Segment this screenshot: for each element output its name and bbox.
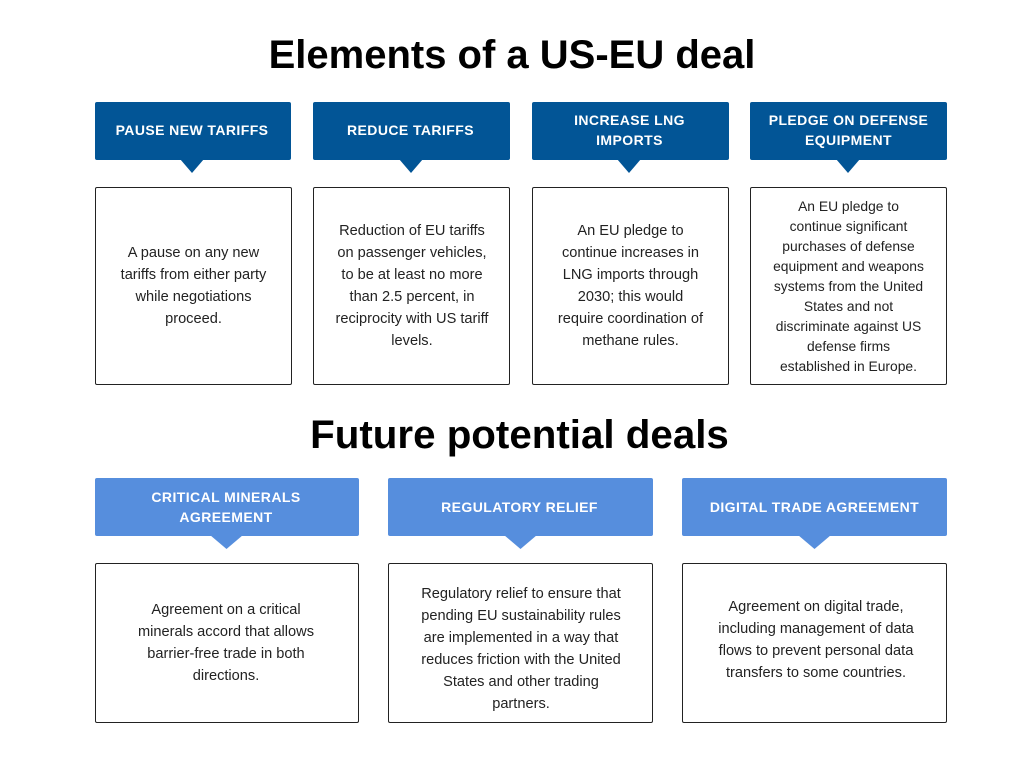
card: pledge on defense equipment text: equipment and weapons [773,258,924,274]
card: critical minerals text: Agreement on a critical [151,602,301,618]
card: reduce tariffs text: Reduction of EU tariffs [339,223,485,239]
tag: pledge on defense equipment: PLEDGE ON DEFENSE [769,112,928,128]
tag: digital trade agreement [682,478,947,549]
card: increase LNG imports text: 2030; this would [578,289,683,305]
card: pledge on defense equipment text: systems from the United [774,278,923,294]
card: pledge on defense equipment text: States and not [804,298,893,314]
tag: increase LNG imports: IMPORTS [596,132,663,148]
card: pledge on defense equipment text: established in Europe. [780,358,917,374]
tag: critical minerals agreement: CRITICAL MINERALS [151,489,301,505]
card: pause new tariffs text: while negotiations [135,289,252,305]
card: reduce tariffs text: reciprocity with US tariff [335,311,488,327]
card: pledge on defense equipment text: An EU pledge to [798,198,899,214]
tag: digital trade agreement: DIGITAL TRADE AGREEMENT [710,499,919,515]
tag: critical minerals agreement [95,478,359,549]
card: pause new tariffs text: proceed. [165,311,222,327]
tag: reduce tariffs [313,102,510,173]
card: reduce tariffs text: than 2.5 percent, in [350,289,474,305]
card: increase LNG imports text: require coordination of [558,311,703,327]
heading: Future potential deals: Future potential deals [310,412,729,457]
card: critical minerals text: minerals accord that allows [138,624,314,640]
card: pause new tariffs text: tariffs from either party [121,267,266,283]
card: regulatory relief text: partners. [492,696,550,712]
card: digital trade text: flows to prevent personal data [719,643,913,659]
card: regulatory relief text: Regulatory relief to ensure that [421,586,621,602]
tag: pledge on defense equipment: EQUIPMENT [805,132,892,148]
title: Elements of a US-EU deal: Elements of a US-EU deal [269,33,755,77]
card: reduce tariffs text: on passenger vehicles, [337,245,487,261]
card: digital trade text: including management of data [718,621,914,637]
card: regulatory relief text: reduces friction with the United [421,652,621,668]
card: pledge on defense equipment text: purchases of defense [782,238,915,254]
card: critical minerals text [95,563,359,723]
tag: pledge on defense equipment [750,102,947,173]
card: regulatory relief text: States and other trading [443,674,599,690]
card: reduce tariffs text: to be at least no more [341,267,483,283]
card: increase LNG imports text: methane rules. [582,333,679,349]
card: reduce tariffs text [313,187,510,385]
tag: increase LNG imports: INCREASE LNG [574,112,685,128]
card: pledge on defense equipment text: discriminate against US [776,318,921,334]
card: pause new tariffs text [95,187,292,385]
card: critical minerals text: directions. [193,668,259,684]
card: pledge on defense equipment text: defense firms [807,338,890,354]
card: reduce tariffs text: levels. [391,333,433,349]
tag: regulatory relief [388,478,653,549]
card: increase LNG imports text [532,187,729,385]
tag: pause new tariffs [95,102,291,173]
card: increase LNG imports text: LNG imports through [563,267,698,283]
card: regulatory relief text [388,563,653,723]
card: regulatory relief text: are implemented in a way that [424,630,618,646]
card: regulatory relief text: pending EU sustainability rules [421,608,621,624]
card: pause new tariffs text: A pause on any new [128,245,259,261]
tag: reduce tariffs: REDUCE TARIFFS [347,122,474,138]
card: critical minerals text: barrier-free trade in both [147,646,305,662]
card: digital trade text: transfers to some countries. [726,665,906,681]
card: digital trade text [682,563,947,723]
tag: critical minerals agreement: AGREEMENT [179,509,273,525]
card: pledge on defense equipment text [750,187,947,385]
card: digital trade text: Agreement on digital trade, [728,599,904,615]
tag: pause new tariffs: PAUSE NEW TARIFFS [116,122,268,138]
tag: increase LNG imports [532,102,729,173]
card: increase LNG imports text: An EU pledge to [577,223,684,239]
card: pledge on defense equipment text: continue significant [790,218,907,234]
tag: regulatory relief: REGULATORY RELIEF [441,499,598,515]
card: increase LNG imports text: continue increases in [562,245,699,261]
